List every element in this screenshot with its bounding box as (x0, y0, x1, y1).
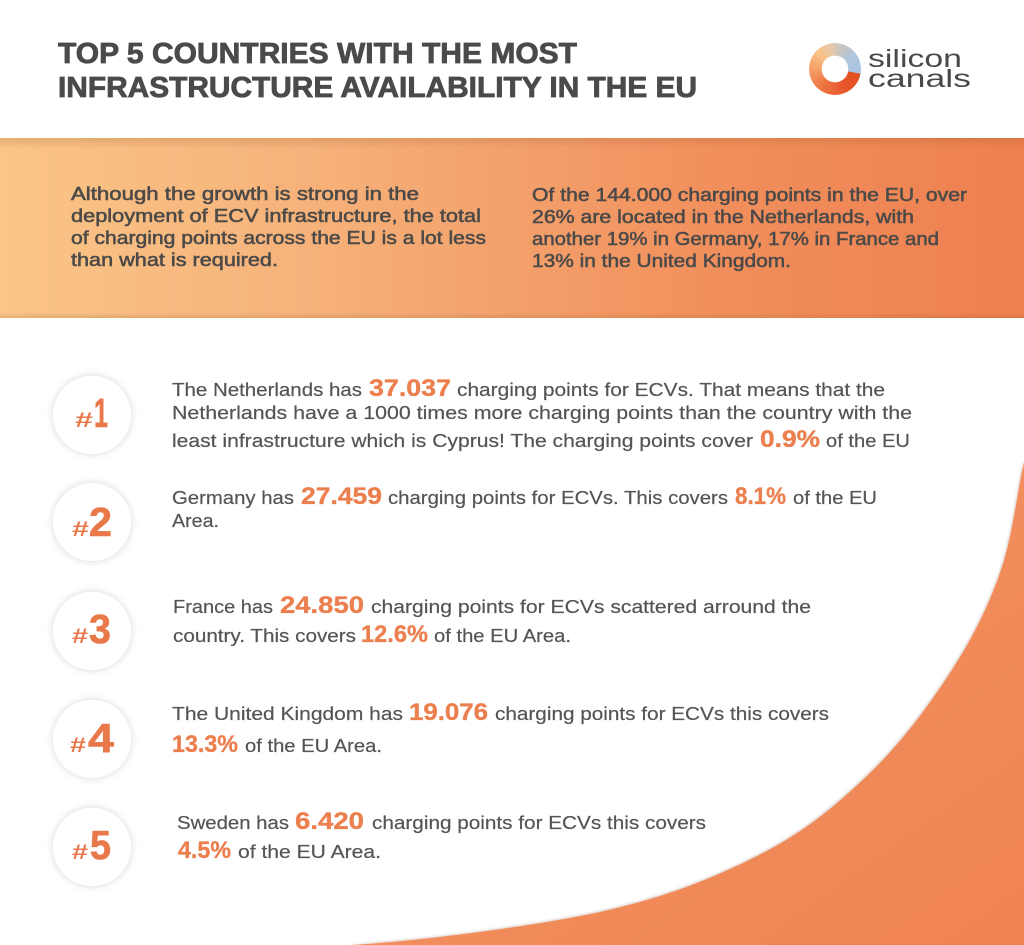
badge #1: # (75, 409, 93, 432)
text 1: of the EU (826, 430, 910, 451)
text 4: 19.076 (409, 699, 488, 726)
badge #3 (53, 592, 131, 670)
intro text left: than what is required. (71, 249, 278, 270)
text 1: 0.9% (760, 426, 820, 453)
text 2: Area. (172, 510, 219, 531)
badge #2: # (72, 518, 89, 541)
intro text left: Although the growth is strong in the (71, 183, 419, 204)
intro text left: of charging points across the EU is a lot less (71, 227, 486, 248)
logo: Silicon Canals (809, 43, 971, 95)
text 1 (172, 375, 912, 453)
badge #3: 3 (89, 606, 111, 652)
intro text right (532, 184, 967, 271)
text 3: 24.850 (280, 592, 364, 619)
intro text left (71, 183, 486, 270)
intro text right: another 19% in Germany, 17% in France and (532, 228, 939, 249)
text 5: of the EU Area. (238, 841, 381, 862)
text 5: charging points for ECVs this covers (372, 812, 706, 833)
badge #4: # (70, 734, 86, 757)
item 4: United Kingdom (53, 699, 829, 778)
text 5: 4.5% (178, 837, 231, 864)
logo wordmark (868, 45, 971, 93)
text 2: charging points for ECVs. This covers (388, 487, 728, 508)
text 4 (172, 699, 829, 758)
badge #2 (53, 483, 131, 561)
intro text left: deployment of ECV infrastructure, the total (71, 205, 481, 226)
intro text right: 26% are located in the Netherlands, with (532, 206, 914, 227)
text 3: charging points for ECVs scattered arround the (371, 596, 811, 617)
item 5: Sweden (53, 808, 706, 886)
badge #2: 2 (89, 499, 112, 545)
badge #4: 4 (88, 715, 114, 761)
badge #4 (53, 700, 131, 778)
icon: logo ring (809, 43, 861, 95)
badge #5 (53, 808, 131, 886)
intro text right: 13% in the United Kingdom. (532, 250, 791, 271)
badge #3: # (72, 625, 88, 648)
text 3: country. This covers (173, 625, 356, 646)
item 3: France (53, 592, 811, 670)
text 2: of the EU (793, 487, 877, 508)
badge #5: 5 (90, 822, 111, 868)
text 1: The Netherlands has (172, 379, 362, 400)
text 3: 12.6% (361, 621, 428, 648)
text 2: Germany has (172, 487, 294, 508)
text 2: 27.459 (301, 483, 382, 510)
badge #1 (53, 376, 131, 454)
badge #1: 1 (94, 390, 108, 436)
text 4: charging points for ECVs this covers (495, 703, 829, 724)
text 1: least infrastructure which is Cyprus! The charging points cover (172, 430, 753, 451)
text 4: of the EU Area. (245, 735, 382, 756)
title (58, 38, 697, 104)
text 5 (177, 808, 706, 864)
text 3: France has (173, 596, 273, 617)
badge #5: # (72, 841, 88, 864)
text 5: Sweden has (177, 812, 289, 833)
text 1: charging points for ECVs. That means that the (457, 379, 885, 400)
item 1: Netherlands (53, 375, 912, 454)
text 3 (173, 592, 811, 648)
item 2: Germany (53, 483, 877, 561)
panel: intro band (0, 138, 1024, 318)
intro text right: Of the 144.000 charging points in the EU, over (532, 184, 967, 205)
text 1: Netherlands have a 1000 times more charging points than the country with the (172, 402, 912, 423)
text 5: 6.420 (295, 808, 364, 835)
text 3: of the EU Area. (434, 625, 571, 646)
text 2: 8.1% (735, 483, 786, 510)
orange corner curve (350, 462, 1024, 945)
text 4: The United Kingdom has (172, 703, 403, 724)
text 1: 37.037 (369, 375, 451, 402)
text 2 (172, 483, 877, 531)
title: INFRASTRUCTURE AVAILABILITY IN THE EU (58, 72, 697, 104)
logo wordmark: silicon (868, 45, 962, 73)
text 4: 13.3% (172, 731, 238, 758)
title: TOP 5 COUNTRIES WITH THE MOST (58, 38, 577, 70)
logo wordmark: canals (868, 65, 971, 93)
